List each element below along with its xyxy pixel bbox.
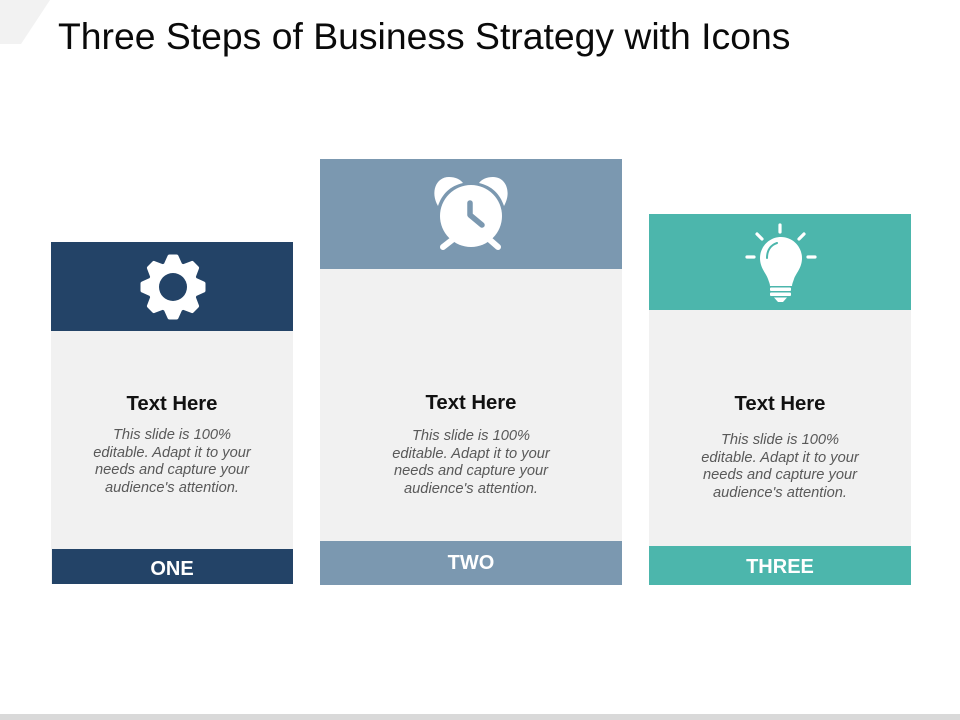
label three (649, 546, 911, 585)
body text three: needs and capture your (703, 467, 857, 483)
icon: alarm clock (434, 177, 508, 250)
body text two (392, 428, 550, 497)
panel: step one (51, 242, 293, 584)
body text one: audience's attention. (105, 480, 239, 496)
body text three: This slide is 100% (721, 432, 839, 448)
body text one: editable. Adapt it to your (93, 445, 251, 461)
panel: step three (649, 214, 911, 585)
body text three (701, 432, 860, 501)
body text two: editable. Adapt it to your (392, 446, 550, 462)
panel: step two (320, 159, 622, 585)
body text one (93, 427, 252, 496)
body text two: audience's attention. (404, 481, 538, 497)
body text two: needs and capture your (394, 463, 548, 479)
body text one: This slide is 100% (113, 427, 231, 443)
body text three: audience's attention. (713, 485, 847, 501)
label two (320, 541, 622, 585)
label two: TWO (448, 552, 494, 574)
body text two: This slide is 100% (412, 428, 530, 444)
icon: light bulb (745, 223, 817, 302)
body text three: editable. Adapt it to your (701, 450, 859, 466)
heading three: Text Here (735, 393, 825, 415)
label one (52, 549, 293, 584)
label one: ONE (150, 558, 194, 580)
heading two: Text Here (426, 392, 516, 414)
header band two (320, 159, 622, 269)
title: Three Steps of Business Strategy with Icons (58, 15, 790, 57)
label three: THREE (746, 556, 814, 578)
body text one: needs and capture your (95, 462, 249, 478)
heading one: Text Here (127, 393, 217, 415)
corner decoration (0, 0, 50, 44)
header band one (51, 242, 293, 331)
footer bar (0, 714, 960, 720)
icon: gear (140, 254, 206, 320)
header band three (649, 214, 911, 310)
